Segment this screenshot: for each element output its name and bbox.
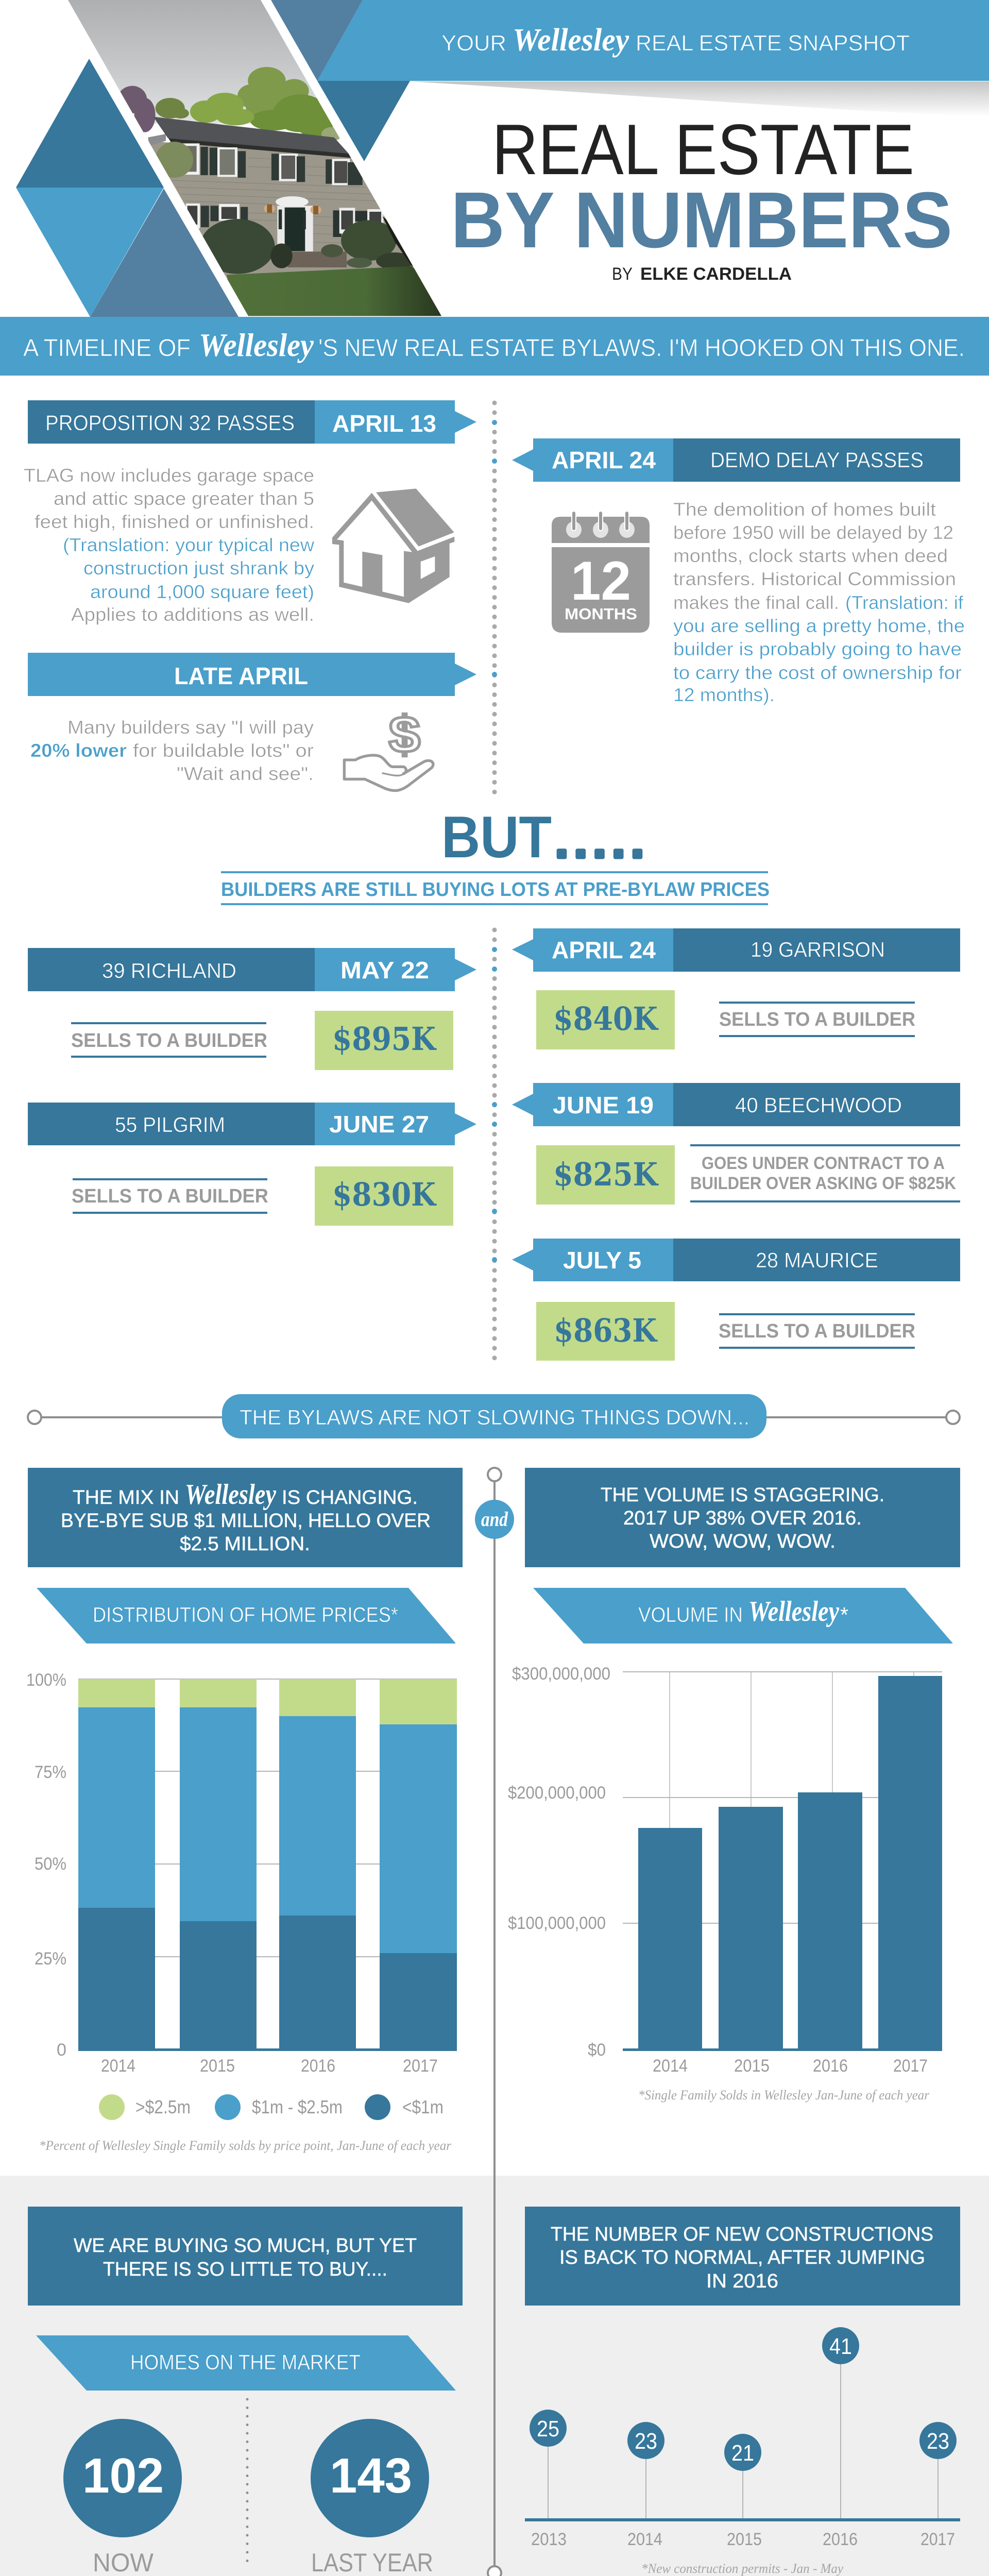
y axis labels: $100,000,000 [508,1913,606,1933]
headline: IS BACK TO NORMAL, AFTER JUMPING [559,2247,925,2268]
panel: mix headline: $2.5 MILLION. [180,1533,310,1555]
lollipop chart: 2017 [920,2530,955,2549]
timeline item: Proposition 32 [24,400,476,625]
geometric shape: left steel triangle [90,189,238,317]
ribbon: volume in Wellesley: VOLUME IN [638,1603,743,1626]
text block: you are selling a pretty home, the [673,615,965,636]
heading: BUT..... [221,805,770,904]
sale: 28 Maurice [512,1239,960,1361]
text block: builder is probably going to have [673,638,962,659]
sale: 55 Pilgrim: SELLS TO A BUILDER [72,1185,268,1207]
center vertical connector with and-badge [475,1468,514,2576]
lollipop chart: 2014 [627,2530,662,2549]
text block: to carry the cost of ownership for [673,662,962,683]
text block: "Wait and see". [177,763,314,784]
sale: 40 Beechwood: JUNE 19 [553,1092,654,1118]
ribbon: volume in Wellesley: Wellesley [748,1596,840,1628]
text block [673,499,965,705]
lollipop chart: 2015 [727,2530,762,2549]
geometric shape: steel triangle top [271,0,363,81]
footnote: *Percent of Wellesley Single Family solds by price point, Jan-June of each year [39,2138,452,2153]
y axis labels: 100% [26,1670,66,1690]
text block [24,465,315,625]
label bar [512,438,960,482]
panel: mix headline: IS CHANGING. [282,1487,418,1509]
text block: before 1950 will be delayed by 12 [673,522,953,543]
x axis labels: 2016 [813,2056,848,2076]
text block: 12 months). [673,684,775,705]
footnote: *Single Family Solds in Wellesley Jan-June of each year [638,2088,930,2103]
x axis labels: 2015 [734,2056,770,2076]
headline: THE NUMBER OF NEW CONSTRUCTIONS [551,2224,933,2245]
section divider: bylaws not slowing [28,1394,960,1438]
sale: 19 Garrison: APRIL 24 [552,937,656,963]
text block: transfers. Historical Commission [673,568,956,589]
ribbon [36,2335,456,2391]
icon: calendar 12 months: 12 [571,550,631,612]
label bar: PROPOSITION 32 PASSES [45,411,295,435]
text block: TLAG now includes garage space [24,465,314,486]
sale: 19 Garrison: $840K [553,1000,659,1038]
top banner text: YOUR [441,31,506,56]
stat: last year: 143 [330,2448,412,2503]
lollipop chart: 23 [927,2429,949,2454]
timeline item: Demo delay [512,438,965,705]
ribbon: volume in Wellesley [533,1588,953,1643]
sale: 55 Pilgrim: 55 PILGRIM [115,1113,225,1137]
sale: 19 Garrison [512,928,960,1049]
panel: mix headline: Wellesley [185,1479,277,1511]
stat: now: 102 [82,2448,164,2503]
text block: (Translation: if [845,592,964,613]
icon: calendar 12 months: MONTHS [565,605,637,623]
panel: homes on the market [28,2207,463,2576]
sale: 39 Richland: 39 RICHLAND [102,959,236,982]
sale: 28 Maurice: 28 MAURICE [756,1248,878,1272]
ribbon: distribution of home prices: DISTRIBUTION OF HOME PRICES* [93,1603,398,1626]
stat: now [63,2419,182,2576]
sale: 40 Beechwood: BUILDER OVER ASKING OF $825K [690,1174,956,1193]
bars 2017 [380,1679,457,2051]
sale: 55 Pilgrim: $830K [332,1176,437,1213]
byline: ELKE CARDELLA [640,264,792,284]
sale: 40 Beechwood: $825K [553,1156,659,1193]
section divider: bylaws not slowing: THE BYLAWS ARE NOT SLOWING THINGS DOWN... [240,1405,749,1429]
lollipop chart: 21 [731,2441,754,2466]
sale: 39 Richland: $895K [332,1020,437,1058]
geometric shape: dark triangle under banner [317,81,410,161]
lollipop chart: 2013 [531,2530,567,2549]
legend: <$1m [402,2096,444,2117]
text block: Applies to additions as well. [71,604,314,625]
sale: 40 Beechwood: 40 BEECHWOOD [735,1093,902,1117]
headline: THERE IS SO LITTLE TO BUY.... [103,2259,387,2280]
y axis labels [508,1664,610,2060]
text block: Many builders say "I will pay [67,717,314,738]
x axis labels: 2014 [653,2056,688,2076]
lollipop chart: 25 [537,2416,559,2442]
sale: 28 Maurice: SELLS TO A BUILDER [719,1320,915,1342]
text block [30,717,314,784]
sale: 39 Richland: SELLS TO A BUILDER [71,1030,267,1052]
label bar: APRIL 24 [552,447,656,473]
top banner text: Wellesley [513,23,629,58]
text block: feet high, finished or unfinished. [35,511,314,532]
heading: BUT.....: BUT [441,805,552,870]
legend: >$2.5m [135,2096,191,2117]
timeline dotted line: bylaws [492,403,497,792]
sale: 55 Pilgrim [28,1103,476,1226]
sale: 28 Maurice: $863K [554,1312,658,1349]
text block: makes the final call. [673,592,839,613]
sale: 39 Richland: MAY 22 [340,957,429,984]
headline: WE ARE BUYING SO MUCH, BUT YET [74,2235,417,2257]
y axis labels [26,1670,66,2060]
text block: for buildable lots" or [133,740,314,761]
x axis labels [653,2056,928,2076]
heading: BUT.....: ..... [555,816,644,868]
panel: volume headline: 2017 UP 38% OVER 2016. [623,1507,862,1529]
label bar [28,653,476,696]
ribbon: distribution of home prices [37,1588,456,1643]
ribbon: volume in Wellesley: * [840,1603,848,1626]
bars 2016 [279,1679,356,2051]
ribbon: HOMES ON THE MARKET [130,2350,361,2374]
x axis labels: 2017 [403,2056,438,2076]
section banner: timeline intro: 'S NEW REAL ESTATE BYLAWS. I'M HOOKED ON THIS ONE. [318,334,965,361]
top banner shape [317,0,989,81]
x axis labels: 2015 [200,2056,235,2076]
legend [99,2094,444,2120]
sale: 40 Beechwood: GOES UNDER CONTRACT TO A [702,1154,945,1173]
icon: hand holding dollar: $ [389,706,420,764]
panel: volume headline: WOW, WOW, WOW. [650,1531,835,1552]
label bar: APRIL 13 [332,410,436,437]
x axis labels: 2017 [893,2056,928,2076]
y axis labels: 0 [57,2040,66,2060]
text block: months, clock starts when deed [673,545,948,566]
panel: volume headline [525,1468,960,1567]
bars 2014 [78,1679,155,2051]
bar chart: sales volume [508,1664,942,2103]
headline [525,2207,960,2306]
top banner text [441,23,910,58]
legend: $1m - $2.5m [252,2096,343,2117]
panel: mix headline: THE MIX IN [73,1487,179,1509]
y axis labels: $0 [588,2040,606,2060]
text block: construction just shrank by [83,557,314,579]
title: BY NUMBERS [451,176,952,264]
photo: colonial house [62,0,471,316]
stat: last year [311,2419,433,2576]
bars [623,1676,942,2051]
lollipop chart: 23 [635,2429,657,2454]
y axis labels: $300,000,000 [512,1664,610,1684]
text block: (Translation: your typical new [63,534,315,555]
section banner: timeline intro [0,317,989,376]
label bar [28,400,476,444]
text block: The demolition of homes built [673,499,936,520]
text block: and attic space greater than 5 [54,488,314,509]
panel: mix headline [28,1468,463,1567]
sale: 39 Richland [28,948,476,1070]
sale: 19 Garrison: 19 GARRISON [751,938,885,961]
geometric shape: left blue triangle [16,188,164,317]
bars 2015 [180,1679,257,2051]
icon: house [332,488,454,603]
subheading: builders still buying: BUILDERS ARE STILL BUYING LOTS AT PRE-BYLAW PRICES [221,879,770,901]
timeline item: Late April [28,653,476,791]
y axis labels: $200,000,000 [508,1783,606,1803]
text block: 20% lower [30,740,127,761]
sale: 40 Beechwood [512,1083,960,1205]
y axis labels: 50% [35,1854,66,1874]
stacked bar chart: distribution of home prices [26,1670,457,2153]
panel: new constructions [525,2207,960,2576]
lollipop chart: 2016 [823,2530,858,2549]
x axis labels [101,2056,438,2076]
panel: volume headline: THE VOLUME IS STAGGERING. [601,1484,884,1506]
center vertical connector with and-badge: and [481,1507,508,1531]
gray section background [0,2176,989,2576]
sale: 28 Maurice: JULY 5 [563,1247,641,1274]
section banner: timeline intro: A TIMELINE OF [23,334,191,361]
header: graphic shapes and photo [16,0,989,317]
icon: hand holding dollar [344,706,433,791]
footnote: *New construction permits - Jan - May [641,2561,843,2576]
byline: BY [612,264,633,284]
panel: mix headline: BYE-BYE SUB $1 MILLION, HELLO OVER [61,1510,431,1532]
shadow under top banner [410,81,989,116]
headline: IN 2016 [706,2270,778,2292]
sale: 19 Garrison: SELLS TO A BUILDER [719,1009,915,1030]
sale: 55 Pilgrim: JUNE 27 [329,1111,429,1138]
top banner text: REAL ESTATE SNAPSHOT [636,31,910,56]
label bar: LATE APRIL [174,663,308,689]
y axis labels: 75% [35,1762,66,1782]
icon: calendar 12 months [552,511,650,633]
geometric shape: left dark triangle [16,59,164,188]
title [451,110,952,264]
title: REAL ESTATE [492,110,914,190]
label bar: DEMO DELAY PASSES [710,448,924,472]
lollipop chart [525,2327,960,2549]
y axis labels: 25% [35,1949,66,1969]
section banner: timeline intro: Wellesley [199,327,314,363]
headline [28,2207,463,2306]
lollipop chart: 41 [829,2334,852,2359]
x axis labels: 2016 [301,2056,335,2076]
timeline dotted line: sales [492,930,497,1358]
x axis labels: 2014 [101,2056,135,2076]
text block: around 1,000 square feet) [90,581,314,602]
